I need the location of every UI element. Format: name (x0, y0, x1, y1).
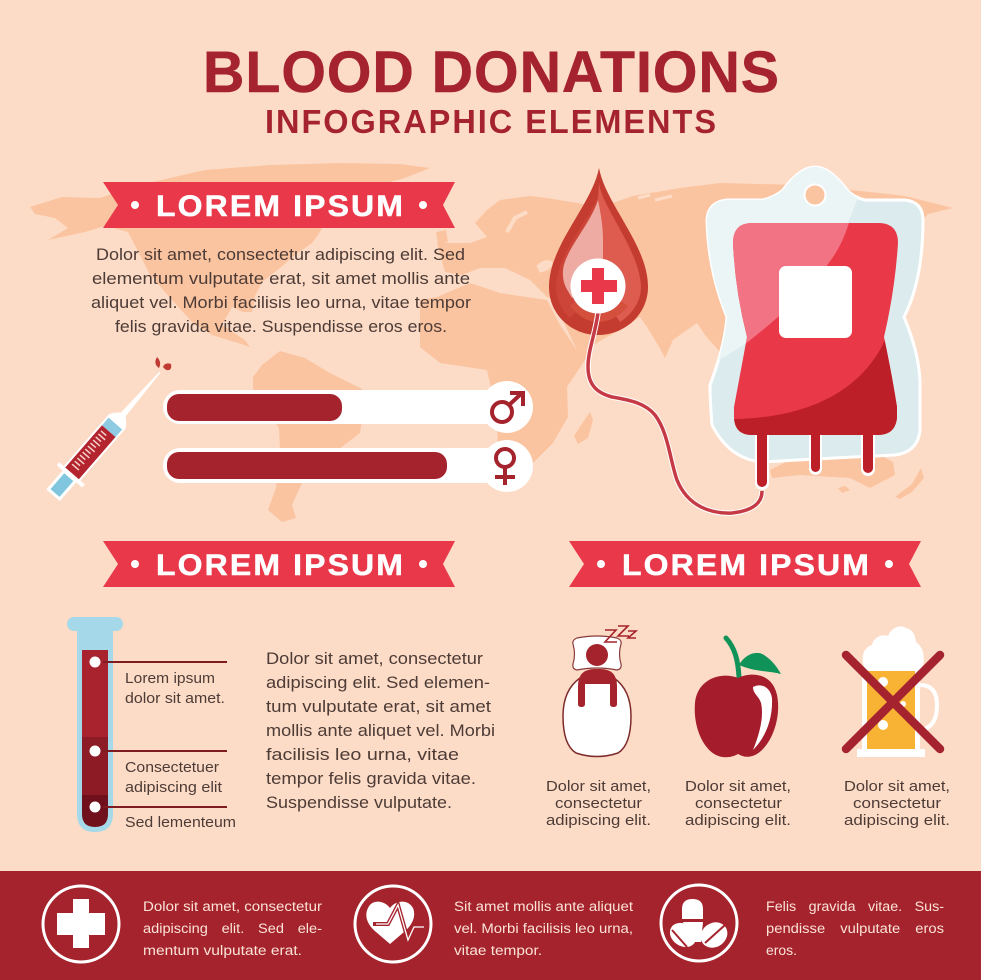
icon: syringe (40, 357, 173, 506)
text block: middle paragraph: tempor felis gravida vitae. (266, 770, 476, 788)
caption: beer: Dolor sit amet, (844, 779, 950, 795)
caption: apple (685, 779, 791, 829)
ribbon heading: bottom left (103, 541, 455, 587)
zzz (605, 626, 636, 642)
title line 2: INFOGRAPHIC ELEMENTS (265, 103, 718, 140)
caption: apple: Dolor sit amet, (685, 779, 791, 795)
beer (867, 671, 915, 749)
chart: male bar (163, 381, 533, 433)
map light details (507, 195, 672, 272)
caption: sleep: adipiscing elit. (546, 813, 651, 829)
footer text 3: Felis gravida vitae. Sus- (766, 899, 944, 914)
ribbon heading: bottom left: LOREM IPSUM (156, 549, 405, 582)
caption: sleep: Dolor sit amet, (546, 779, 651, 795)
title (203, 40, 780, 140)
footer text 2: Sit amet mollis ante aliquet (454, 899, 633, 914)
icon: blood bag (700, 160, 923, 490)
footer text 3 (766, 899, 944, 958)
tube labels: Lorem ipsum (125, 671, 215, 687)
drip tubes (755, 428, 769, 490)
blood fill (733, 223, 898, 435)
footer text 2: vel. Morbi facilisis leo urna, (454, 921, 633, 936)
label (779, 266, 852, 338)
text block: middle paragraph: Suspendisse vulputate. (266, 794, 452, 812)
leaf (739, 653, 781, 674)
text block: middle paragraph (266, 650, 495, 812)
title line 1: BLOOD DONATIONS (203, 40, 780, 105)
ribbon heading: bottom right: LOREM IPSUM (622, 549, 871, 582)
footer text 2 (454, 899, 633, 958)
caption: apple: consectetur (695, 796, 782, 812)
text block: middle paragraph: tum vulputate erat, sit amet (266, 698, 491, 716)
cross (846, 655, 940, 749)
foam (863, 626, 924, 672)
icon: male symbol (492, 393, 523, 422)
head (586, 644, 608, 666)
blanket (563, 678, 631, 756)
shoulders (578, 669, 617, 707)
footer text 3: pendisse vulputate eros (766, 921, 944, 936)
world map (30, 163, 953, 522)
leader lines (103, 662, 227, 807)
cross badge (570, 258, 626, 314)
text block: intro paragraph (91, 246, 472, 336)
blood drops (155, 357, 160, 368)
icon: no beer (846, 626, 940, 757)
icon: pills (661, 885, 737, 961)
tube (588, 313, 762, 513)
footer text 3: eros. (766, 943, 797, 958)
text block: intro paragraph: elementum vulputate erat, sit amet mollis ante (92, 270, 470, 288)
caption: beer (844, 779, 950, 829)
footer text 2: vitae tempor. (454, 943, 542, 958)
text block: middle paragraph: adipiscing elit. Sed elemen- (266, 674, 490, 692)
icon: blood drop with tube (549, 168, 762, 513)
test tube chart (67, 617, 236, 832)
icon: apple (695, 638, 781, 757)
tube glass (77, 625, 113, 832)
blood layers (82, 650, 108, 737)
chart: female bar (163, 440, 533, 492)
footer text 1: mentum vulputate erat. (143, 943, 302, 958)
icon: sleep (563, 626, 636, 756)
caption: beer: adipiscing elit. (844, 813, 950, 829)
handle (920, 685, 937, 730)
test tube chart: adipiscing elit (125, 780, 222, 796)
text block: middle paragraph: facilisis leo urna, vitae (266, 746, 459, 764)
bubbles (878, 677, 888, 687)
apple body (695, 675, 778, 757)
text block: intro paragraph: Dolor sit amet, consectetur adipiscing elit. Sed (96, 246, 465, 264)
stem (726, 638, 739, 677)
bag shell (707, 167, 923, 462)
icon: medical cross (43, 886, 119, 962)
glass highlight (707, 167, 858, 360)
pillow (573, 636, 621, 670)
caption: sleep (546, 779, 651, 829)
test tube chart: dolor sit amet. (125, 691, 225, 707)
text block: intro paragraph: aliquet vel. Morbi facilisis leo urna, vitae tempor (91, 294, 472, 312)
ribbon heading: bottom right (569, 541, 921, 587)
text block: middle paragraph: mollis ante aliquet vel. Morbi (266, 722, 495, 740)
hanger hole (804, 184, 826, 206)
icon: female symbol (495, 449, 515, 485)
footer text 1: Dolor sit amet, consectetur (143, 899, 323, 914)
caption: sleep: consectetur (555, 796, 642, 812)
footer band (0, 871, 981, 980)
footer text 1 (143, 899, 323, 958)
mug walls (862, 671, 867, 751)
caption: apple: adipiscing elit. (685, 813, 791, 829)
footer text 1: adipiscing elit. Sed ele- (143, 921, 322, 936)
test tube chart: Sed lementeum (125, 815, 236, 831)
caption: beer: consectetur (853, 796, 941, 812)
text block: intro paragraph: felis gravida vitae. Suspendisse eros eros. (115, 318, 447, 336)
text block: middle paragraph: Dolor sit amet, consectetur (266, 650, 484, 668)
icon: heart with pulse (355, 886, 431, 962)
test tube chart: Consectetuer (125, 760, 219, 776)
highlight (753, 685, 772, 750)
drop (549, 168, 648, 335)
ribbon heading: top left: LOREM IPSUM (156, 190, 405, 223)
ribbon heading: top left (103, 182, 455, 228)
base (857, 749, 925, 757)
